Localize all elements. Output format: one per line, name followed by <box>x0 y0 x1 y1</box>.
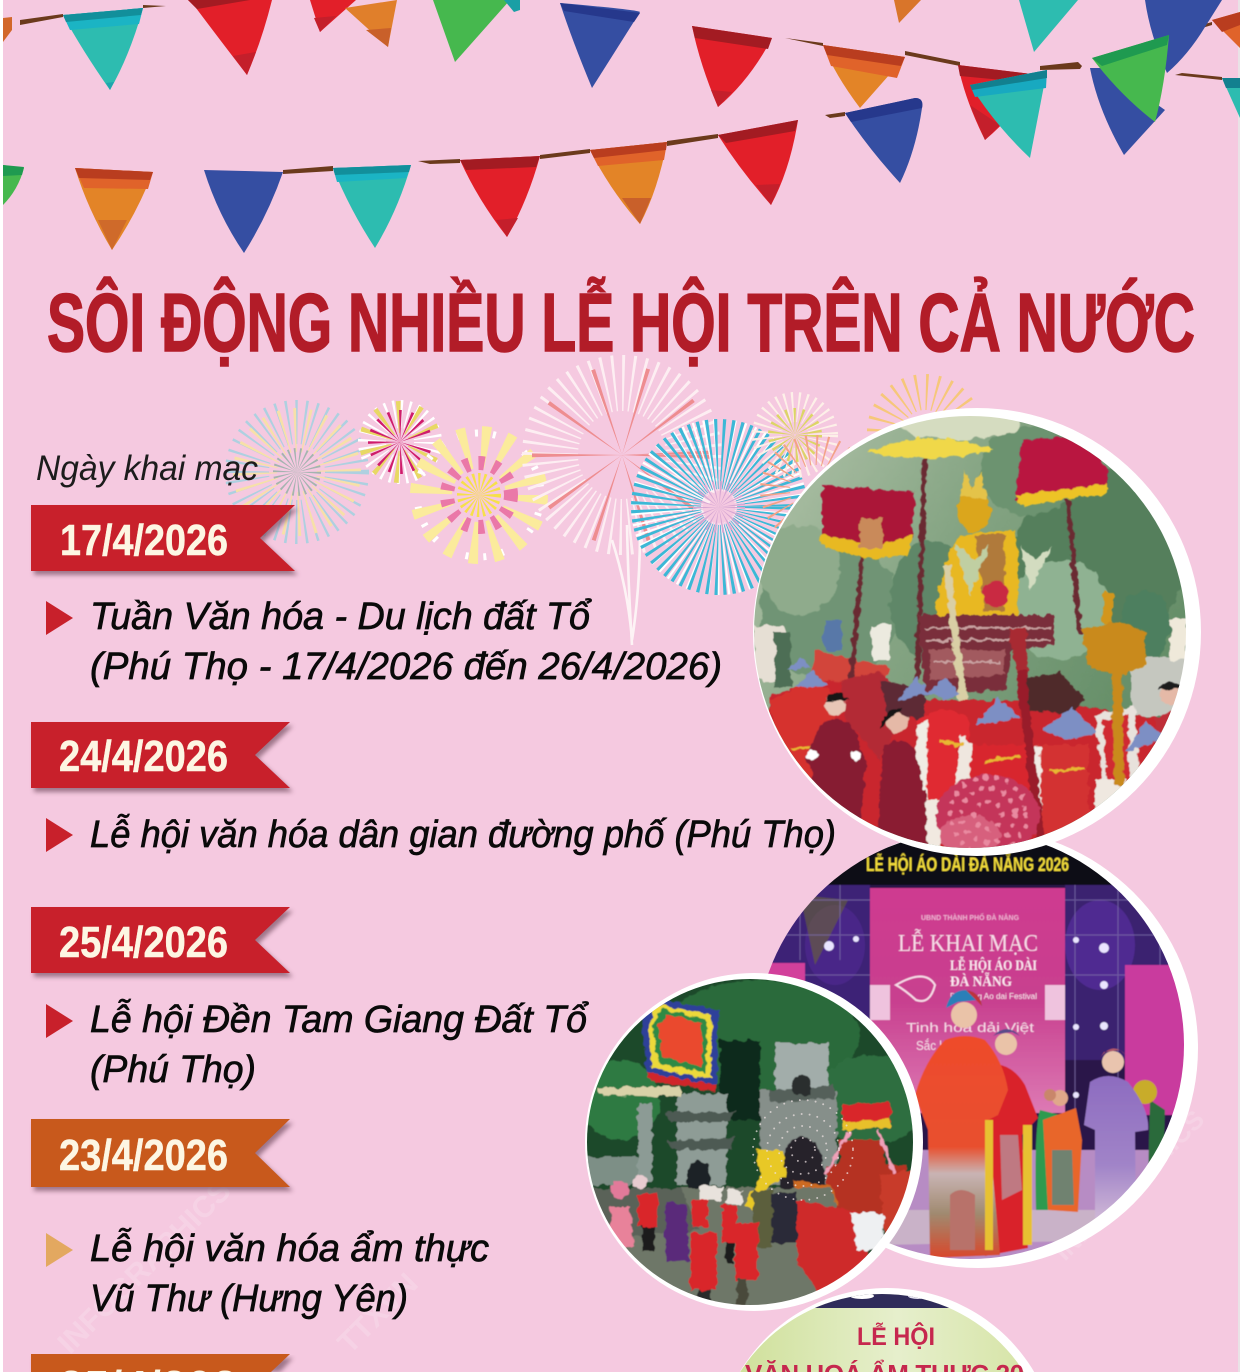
item: Lễ hội văn hóa dân gian đường phố: Lễ hội văn hóa dân gian đường phố (Phú Thọ) <box>90 812 836 856</box>
women in dark red <box>804 718 868 818</box>
flag <box>642 998 718 1085</box>
firework: pale burst <box>767 407 823 463</box>
umbrella poles <box>850 455 1080 695</box>
item: Lễ hội văn hóa ẩm thực Vũ Thư: Vũ Thư (Hưng Yên) <box>90 1278 408 1320</box>
photo circle: Áo dài festival Đà Nẵng: LỄ HỘI ÁO DÀI <box>950 956 1037 974</box>
photo circle: Áo dài festival Đà Nẵng: Tinh hoa dải Việt <box>906 1020 1034 1035</box>
gates <box>588 1157 640 1185</box>
photo circle: Áo dài festival Đà Nẵng: LỄ HỘI ÁO DÀI ĐÀ NẴNG 2026 <box>866 854 1069 876</box>
lion <box>745 1150 786 1212</box>
item: Lễ hội Đền Tam Giang Đất Tổ <box>46 997 589 1091</box>
photo circle: Áo dài festival Đà Nẵng: Da Nang Ao dai Festival <box>950 992 1037 1001</box>
sword <box>942 564 969 702</box>
photo circle: Áo dài festival Đà Nẵng: ĐÀ NẴNG <box>950 972 1012 990</box>
firework: pink burst <box>550 383 694 645</box>
date ribbon: 23/4/2026: 23/4/2026 <box>59 1131 228 1180</box>
firework: orange burst behind photo <box>775 392 965 530</box>
rose petals <box>936 775 1040 855</box>
firework: yellow burst <box>417 433 541 557</box>
date ribbon: partially cropped <box>31 1354 293 1372</box>
date ribbon: 17/4/2026: 17/4/2026 <box>60 516 228 565</box>
photo circle: Áo dài festival Đà Nẵng: UBND THÀNH PHỐ ĐÀ NẴNG <box>921 912 1020 922</box>
photo circle: food culture festival <box>735 1288 1034 1372</box>
item: Tuần Văn hóa - Du lịch đất Tổ: (Phú Thọ - 17/4/2026 đến 26/4/2026) <box>90 646 722 688</box>
item: Lễ hội văn hóa ẩm thực Vũ Thư: Lễ hội văn hóa ẩm thực <box>90 1226 489 1270</box>
faint watermark: TTXVN <box>332 1267 424 1360</box>
palanquin <box>842 1102 891 1125</box>
fireworks decoration <box>247 383 965 645</box>
label: opening date: Ngày khai mạc <box>36 449 258 488</box>
palanquin <box>918 615 1054 695</box>
date ribbon: 17/4/2026 <box>31 505 298 575</box>
item: Lễ hội văn hóa ẩm thực Vũ Thư <box>46 1226 489 1320</box>
gold dragon staff <box>1103 592 1113 624</box>
faint watermark <box>52 1104 1210 1360</box>
bunting flags: top string <box>3 0 1240 158</box>
item: Tuần Văn hóa - Du lịch đất Tổ <box>46 596 722 688</box>
photo circle: Áo dài festival Đà Nẵng <box>750 828 1198 1270</box>
photo circle: Áo dài festival Đà Nẵng: LỄ KHAI MẠC <box>898 930 1038 957</box>
date ribbon: 25/4/2026 <box>31 907 293 977</box>
ground <box>626 1185 838 1305</box>
firework: blue burst <box>666 454 772 560</box>
item: Lễ hội Đền Tam Giang Đất Tổ: (Phú Thọ) <box>90 1049 256 1091</box>
crowd base <box>768 680 1156 847</box>
photo circle: Áo dài festival Đà Nẵng: Sắc hương <box>916 1038 974 1053</box>
photo circle: food culture festival: LỄ HỘI <box>857 1321 935 1351</box>
bunting flags: bottom string <box>3 98 922 253</box>
faint watermark: INFOGRAPHICS <box>52 1174 238 1360</box>
firework: magenta burst <box>372 414 428 470</box>
item: Lễ hội Đền Tam Giang Đất Tổ: Lễ hội Đền Tam Giang Đất Tổ <box>90 997 589 1041</box>
red staff <box>1008 628 1028 676</box>
firework: grey-blue burst <box>247 422 347 522</box>
date ribbon: 23/4/2026 <box>31 1119 293 1191</box>
statue <box>936 530 1019 615</box>
crowd <box>753 1190 773 1247</box>
photo circle: Tam Giang temple <box>580 973 925 1315</box>
palanquin hats <box>787 657 1165 752</box>
date ribbon: 24/4/2026: 24/4/2026 <box>59 732 228 781</box>
date ribbon: 25/4/2026: 25/4/2026 <box>59 918 228 967</box>
date ribbon: 24/4/2026 <box>31 722 293 792</box>
photo circle: Phú Thọ procession <box>740 405 1201 865</box>
item: Tuần Văn hóa - Du lịch đất Tổ: Tuần Văn hóa - Du lịch đất Tổ <box>90 596 592 638</box>
faint watermark: INFOGRAPHICS <box>1048 1104 1210 1266</box>
